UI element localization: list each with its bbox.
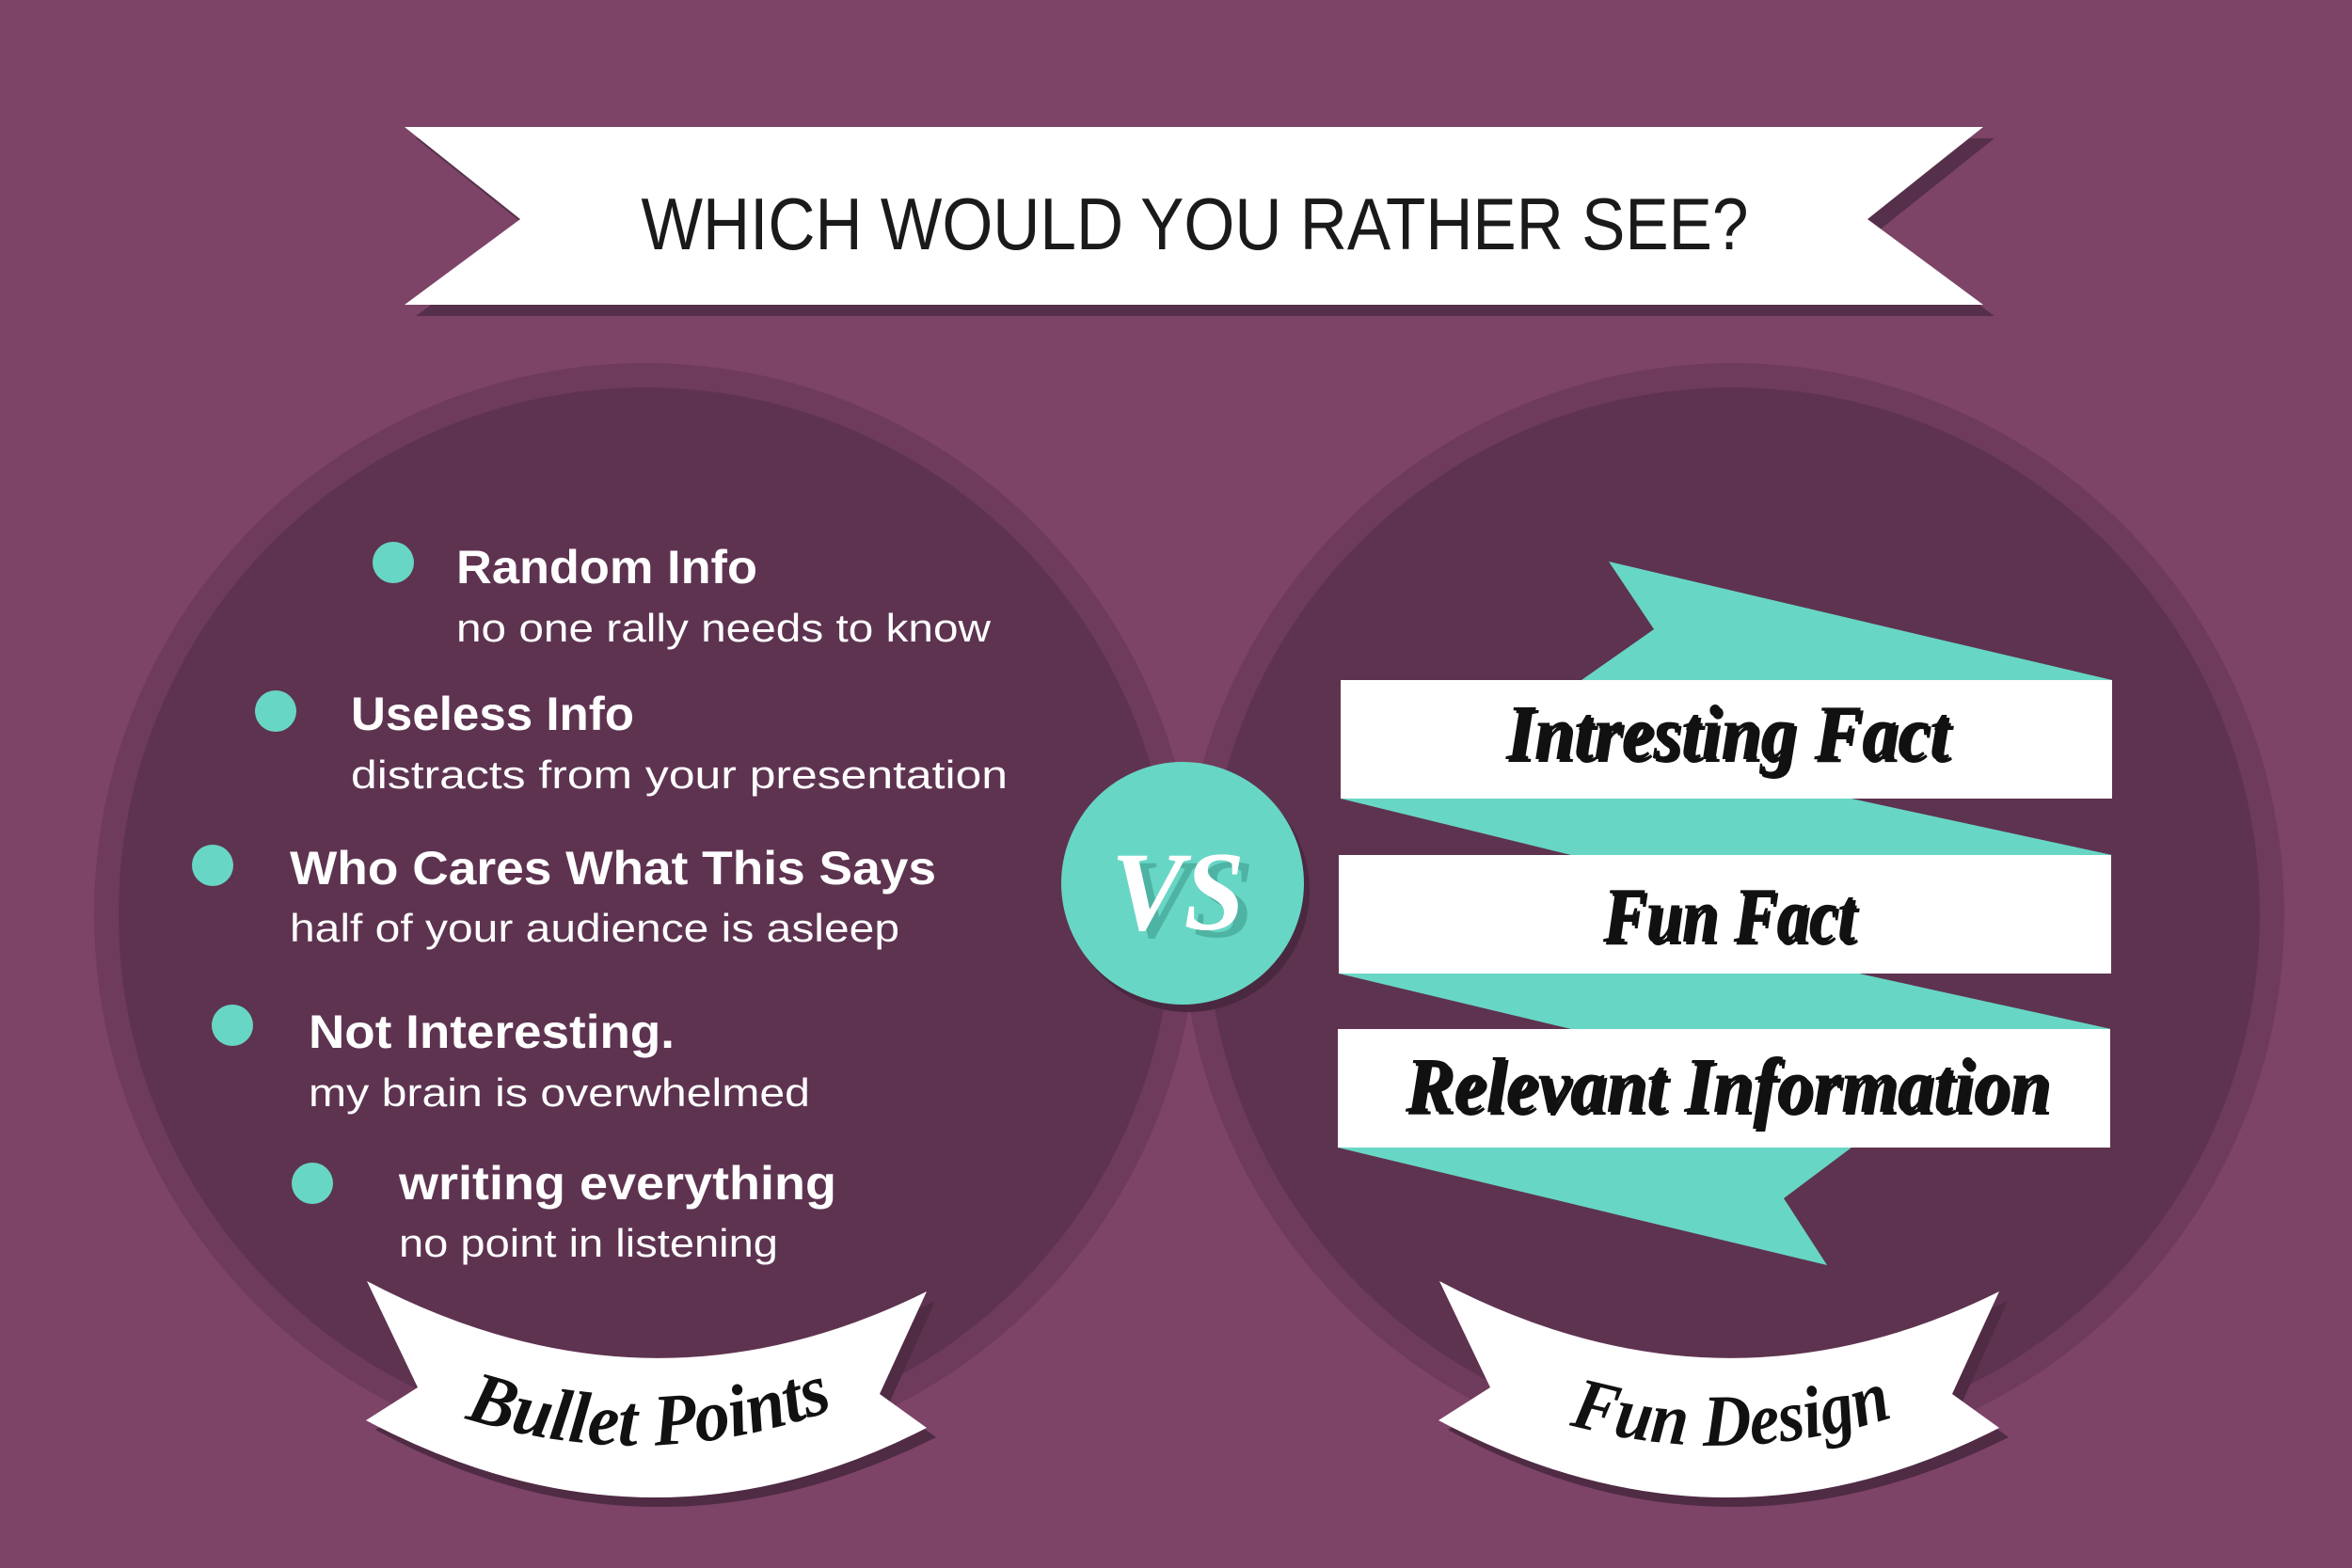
bullet 3: Who Cares What This Says (290, 842, 936, 895)
title: WHICH WOULD YOU RATHER SEE? (642, 182, 1748, 265)
bullet list (192, 541, 1008, 1265)
fact 2 (1339, 855, 2111, 974)
fact 1: Intresting Fact (1508, 692, 1954, 780)
bullet 5 (292, 1157, 836, 1265)
banner: Bullet Points (366, 1281, 936, 1507)
banner: Bullet Points: Bullet Points (464, 1373, 828, 1447)
bullet 2: Useless Info (351, 688, 634, 740)
fact 3: Relevant Information (1405, 1042, 2050, 1130)
fact 1: Intresting Fact (1505, 689, 1951, 777)
title banner (405, 127, 1994, 316)
bullet 3: half of your audience is asleep (290, 906, 899, 950)
bullet 1: Random Info (456, 541, 757, 594)
banner: Fun Design: Fun Design (1569, 1380, 1890, 1449)
bullet 5: no point in listening (399, 1221, 778, 1265)
teal ribbon with facts (1338, 562, 2112, 1265)
VS badge: VS (1120, 836, 1254, 961)
bullet 4: Not Interesting. (309, 1006, 675, 1058)
banner: Fun Design (1438, 1281, 2009, 1507)
fact 3 (1338, 1029, 2110, 1148)
fact 2: Fun Fact (1605, 875, 1860, 962)
bullet 2: distracts from your presentation (351, 752, 1008, 797)
bullet 3 (192, 842, 936, 950)
fact 1 (1341, 680, 2112, 799)
bullet 1 (373, 541, 992, 650)
fact 2: Fun Fact (1602, 872, 1857, 959)
fact 3: Relevant Information (1407, 1045, 2053, 1132)
bullet 1: no one rally needs to know (456, 606, 992, 650)
bullet 2 (255, 688, 1008, 797)
bullet 5: writing everything (398, 1157, 836, 1210)
bullet 4 (212, 1005, 810, 1115)
bullet 4: my brain is overwhelmed (309, 1070, 810, 1115)
VS badge: VS (1111, 829, 1245, 954)
VS badge (1061, 762, 1310, 1012)
left circle (94, 363, 1197, 1465)
right circle (1182, 363, 2284, 1465)
